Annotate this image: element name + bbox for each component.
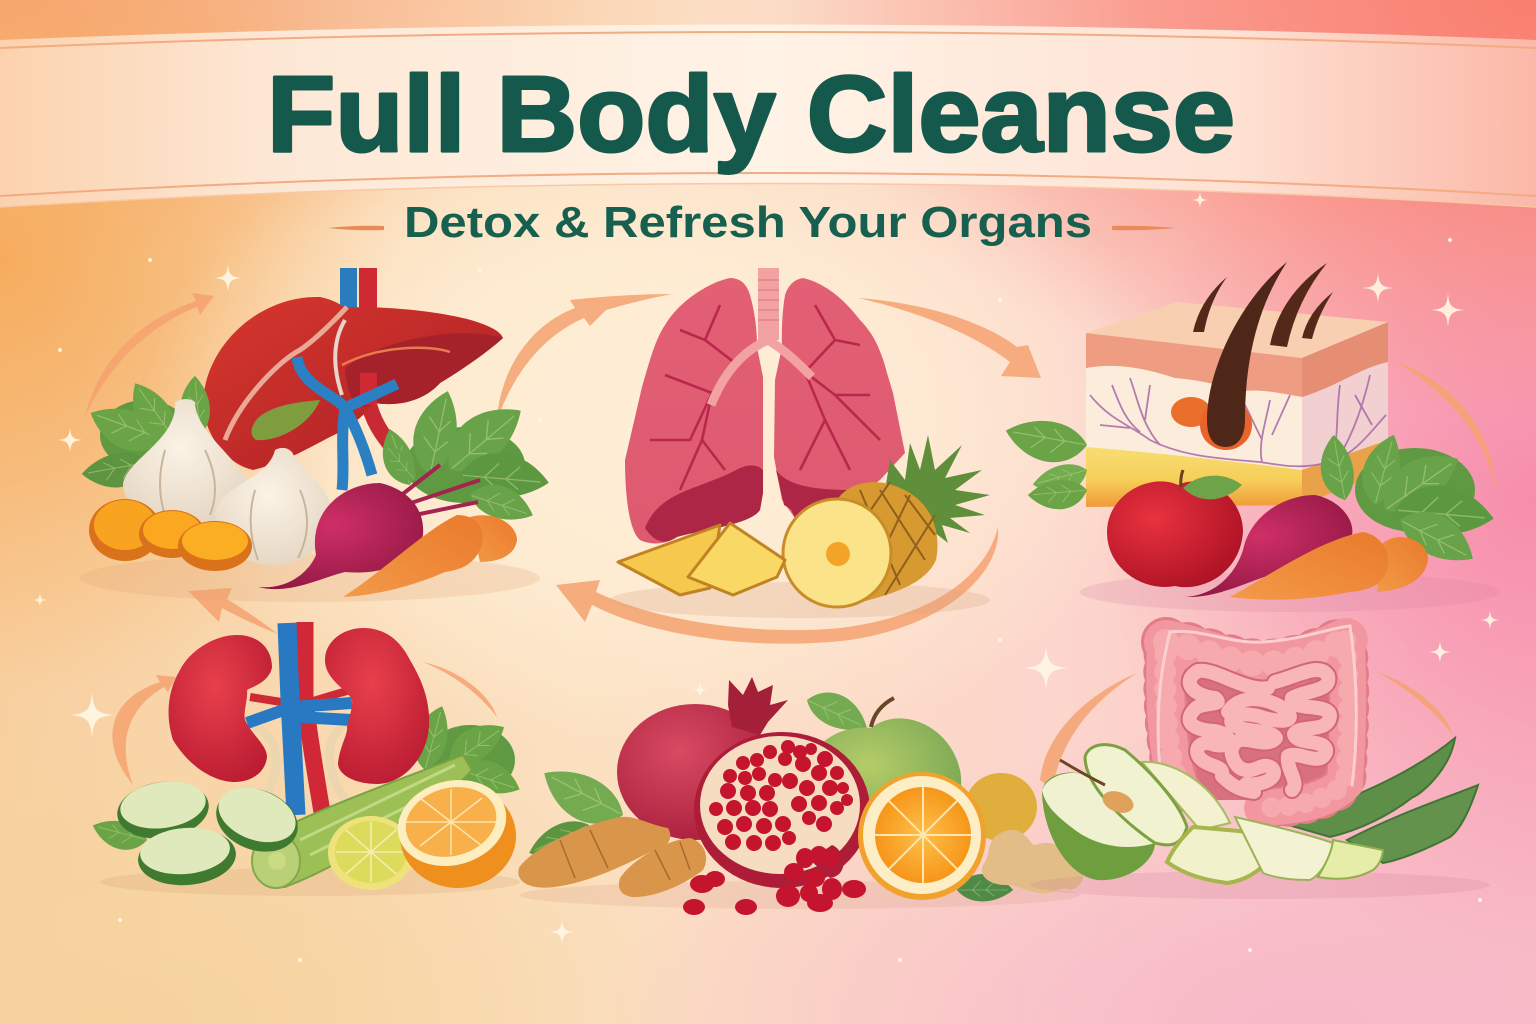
apple: [1107, 470, 1243, 587]
arrow: pineapple arc: [556, 527, 998, 644]
beet greens: [1315, 430, 1496, 574]
icon: skin cross-section: [1086, 262, 1388, 507]
arrow: lungs to skin: [858, 298, 1041, 378]
lime wedge: [1318, 840, 1383, 879]
arrow: skin right arc: [1398, 363, 1495, 490]
pineapple: [783, 482, 938, 607]
apple pieces: [1042, 745, 1230, 880]
arrow: kidney left arc: [112, 675, 176, 785]
celery: [252, 755, 472, 888]
aloe leaves: [1278, 738, 1478, 863]
pomegranate whole: [617, 677, 788, 840]
apple slice: [1167, 827, 1282, 883]
pomegranate half: [694, 732, 870, 888]
leaves: [79, 375, 212, 493]
turmeric slices: [89, 499, 252, 571]
small hairs: [1193, 263, 1333, 347]
pineapple crown: [885, 435, 990, 543]
leaves: [523, 683, 1013, 901]
hair follicle: [1171, 262, 1287, 450]
lemon: [328, 816, 414, 890]
left leaves: [1002, 414, 1091, 512]
icon: intestines: [1158, 626, 1356, 808]
apple wedge: [1235, 817, 1333, 880]
garlic: [123, 399, 333, 565]
subtitle: Detox & Refresh Your Organs: [404, 198, 1092, 247]
icon: lungs: [625, 268, 905, 543]
beet greens: [374, 386, 551, 528]
yellow fruit: [965, 773, 1037, 841]
celery leaves: [89, 701, 525, 855]
pomegranate seeds: [683, 846, 866, 915]
arrow: liver arc: [85, 293, 214, 417]
subtitle flourishes: [328, 226, 1176, 230]
arrow: intestine left arc: [1040, 673, 1137, 790]
cycle arrows: [85, 293, 1495, 790]
panel: intestines: [1030, 626, 1490, 899]
carrots: [343, 515, 517, 597]
cucumber slices: [114, 776, 307, 889]
arrow: liver to lungs: [497, 294, 672, 420]
panel: fruit pile: [518, 677, 1083, 915]
green apple: [807, 698, 961, 835]
panel: lungs: [610, 268, 990, 618]
panel: liver: [79, 268, 551, 602]
sparkles: [33, 192, 1500, 962]
panel: kidneys: [89, 622, 525, 896]
pineapple wedges: [618, 523, 785, 595]
arrow: kidney right arc: [423, 662, 497, 717]
ginger: [982, 830, 1083, 893]
title banner: [0, 24, 1536, 207]
panel: skin: [1002, 262, 1500, 612]
orange: [388, 768, 516, 888]
beet: [258, 483, 423, 589]
turmeric root: [518, 817, 706, 897]
beet: [1185, 495, 1352, 597]
arrow: intestine right arc: [1377, 672, 1453, 735]
icon: kidneys: [169, 622, 429, 815]
title: Full Body Cleanse: [267, 53, 1235, 174]
arrow: kidneys to liver: [188, 588, 278, 634]
carrots: [1230, 532, 1428, 600]
orange: [858, 772, 986, 900]
icon: liver: [203, 268, 503, 490]
